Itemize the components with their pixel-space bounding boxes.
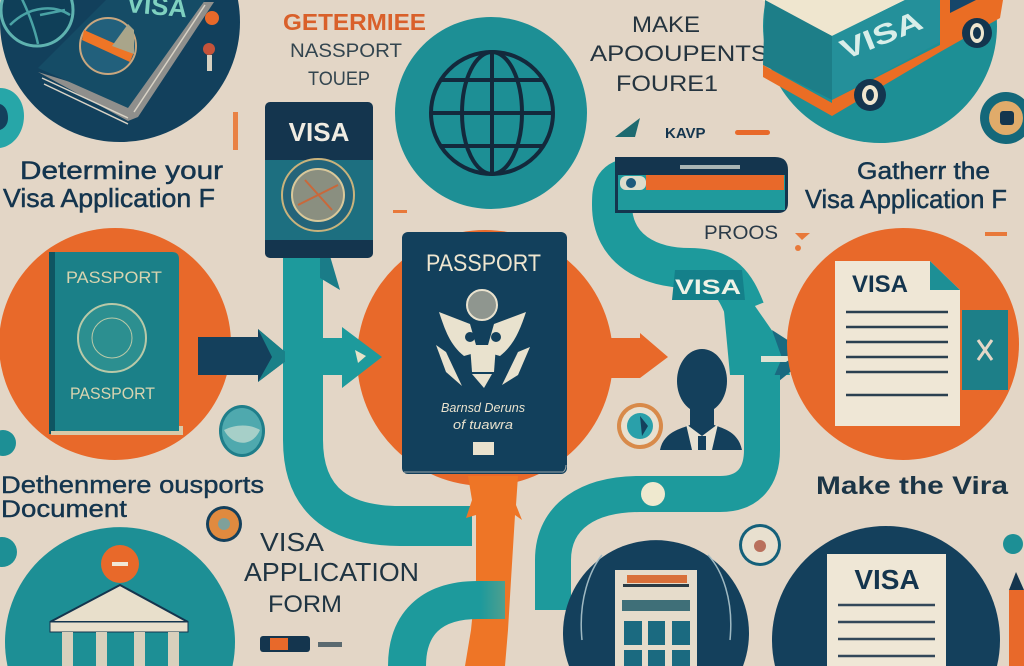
connector: orange ribbon — [465, 476, 522, 666]
passport: central navy passport: of tuawra — [453, 417, 513, 432]
passport: central navy passport — [402, 232, 567, 474]
card: visa booklet: VISA — [289, 117, 350, 147]
panel: left passport orange circle — [0, 228, 231, 460]
icon: person silhouette — [660, 349, 742, 450]
label: visa on route: VISA — [675, 276, 741, 299]
heading: visa application form — [244, 527, 419, 618]
panel: centre orange circle — [357, 230, 613, 486]
panel: right document orange circle: VISA — [852, 271, 908, 298]
heading: make appointments: MAKE — [632, 12, 700, 37]
heading: visa application form: APPLICATION — [244, 557, 419, 587]
icon: left edge teal badge — [0, 88, 24, 148]
passport: central navy passport: PASSPORT — [426, 250, 541, 277]
panel: teal route block before arrow — [722, 290, 790, 375]
heading: determine passport tour: NASSPORT — [290, 41, 402, 62]
connector: teal route to bottom — [553, 375, 762, 610]
panel: delivery truck: VISA — [836, 5, 927, 66]
heading: make appointments: FOURE1 — [616, 71, 718, 96]
panel: top-left passport circle — [0, 0, 240, 142]
arrow: navy to teal arrow — [198, 327, 382, 388]
heading: make appointments: APOOUPENTS — [590, 41, 768, 66]
panel: visa document circle — [772, 526, 1000, 666]
heading: make the visa: Make the Vira — [816, 472, 1009, 500]
icon: globe — [395, 17, 587, 209]
heading: determine passports document — [1, 472, 264, 523]
heading: determine your visa application — [3, 157, 223, 213]
heading: gather the visa application — [805, 158, 1007, 214]
panel: left passport orange circle: PASSPORT — [66, 268, 162, 287]
panel: delivery truck — [762, 0, 1003, 143]
marker: orange tick — [233, 112, 238, 150]
heading: gather the visa application: Visa Application F — [805, 184, 1007, 214]
label: visa on route — [672, 270, 745, 300]
panel: left passport orange circle: PASSPORT — [70, 384, 155, 403]
connector: teal route bottom — [407, 600, 505, 666]
heading: determine passports document: Document — [1, 496, 127, 523]
icon: right edge badge — [980, 92, 1024, 144]
card: visa booklet — [265, 102, 373, 258]
icon: teal small face — [219, 405, 265, 457]
heading: make appointments — [590, 12, 768, 96]
panel: building circle — [563, 540, 749, 666]
arrow: orange arrow — [565, 333, 668, 378]
icon: left edge small teal — [0, 430, 16, 456]
label: bottom small bar — [260, 636, 342, 652]
passport: central navy passport: Barnsd Deruns — [441, 400, 525, 415]
marks: small orange accents — [393, 210, 1007, 251]
label: small icons row — [615, 118, 770, 142]
heading: visa application form: VISA — [260, 527, 325, 557]
icon: pencil at bottom right — [1009, 572, 1024, 666]
arrow: navy pointer to document — [761, 330, 811, 390]
heading: determine passport tour — [283, 9, 426, 90]
arrow: small upward head — [320, 256, 340, 290]
icon: left edge bottom — [0, 537, 17, 567]
icon: small gold-teal circle — [206, 506, 242, 542]
icon: small seal — [739, 524, 781, 566]
panel: bank circle — [5, 527, 235, 666]
label: small icons row: KAVP — [665, 125, 706, 142]
icon: right edge small teal — [1003, 534, 1023, 554]
connector: teal S route from proof card — [612, 177, 745, 310]
heading: determine your visa application: Determine your — [20, 157, 223, 185]
card: proof ticket — [615, 157, 788, 213]
panel: right document orange circle — [787, 228, 1019, 460]
icon: small cream stop on route — [641, 482, 665, 506]
heading: determine passports document: Dethenmere ousports — [1, 472, 264, 499]
icon: small medal — [617, 403, 663, 449]
heading: visa application form: FORM — [268, 591, 342, 618]
connector: teal vertical route under visa booklet — [303, 250, 472, 526]
heading: determine passport tour: GETERMIEE — [283, 9, 426, 35]
heading: determine passport tour: TOUEP — [308, 69, 370, 90]
label: proof: PROOS — [704, 223, 778, 244]
heading: determine your visa application: Visa Application F — [3, 183, 215, 213]
heading: gather the visa application: Gatherr the — [857, 158, 990, 185]
panel: visa document circle: VISA — [854, 564, 920, 595]
